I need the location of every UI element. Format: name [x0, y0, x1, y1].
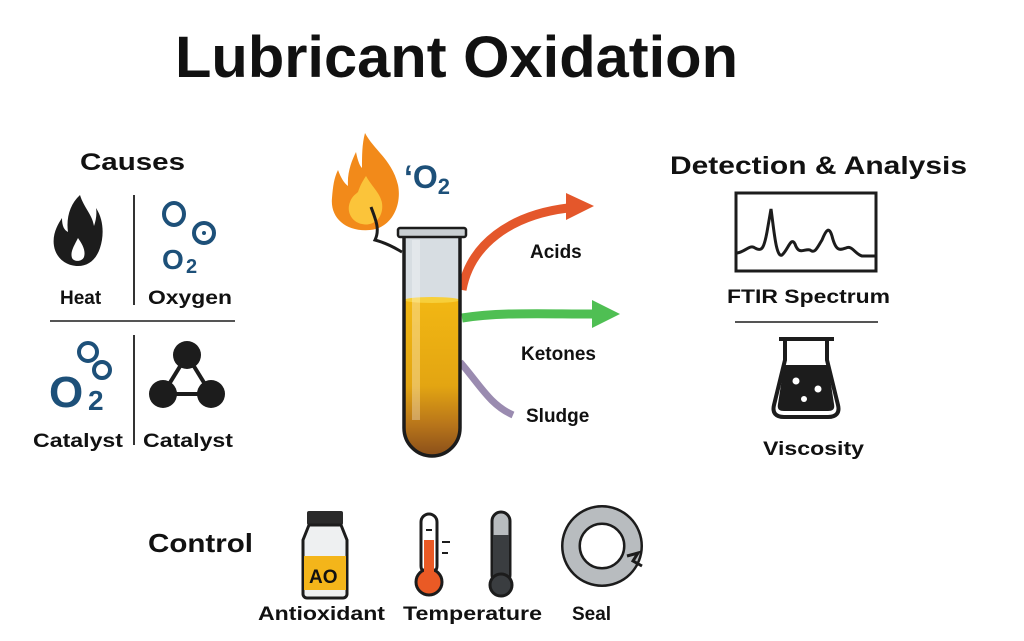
- label: O2: ‘O: [404, 159, 438, 195]
- icon: catalyst O2: 2: [88, 385, 104, 416]
- icon: flask: [773, 339, 839, 417]
- panel: control: [148, 511, 642, 625]
- icon: seal ring: [571, 515, 642, 577]
- label: heat: Heat: [60, 288, 102, 309]
- title: Lubricant Oxidation: [175, 25, 738, 90]
- label: viscosity: Viscosity: [763, 439, 865, 460]
- heading: control: Control: [148, 528, 253, 558]
- panel: detection & analysis: [670, 152, 967, 460]
- panel: reaction: [332, 133, 620, 456]
- panel: causes: [33, 149, 235, 452]
- icon: antioxidant bottle: [303, 511, 347, 598]
- icon: oxygen molecules: O: [162, 244, 184, 275]
- arrow: ketones: [462, 300, 620, 328]
- icon: catalyst O2: O: [49, 368, 83, 417]
- icon: heat flame: [54, 195, 103, 266]
- label: oxygen: Oxygen: [148, 288, 232, 309]
- arrow: acids: [462, 193, 594, 290]
- label: acids: Acids: [530, 242, 582, 263]
- icon: antioxidant bottle: AO: [309, 567, 338, 588]
- label: sludge: Sludge: [526, 406, 589, 427]
- label: catalyst: Catalyst: [33, 431, 124, 452]
- label: FTIR: FTIR Spectrum: [727, 287, 890, 308]
- icon: thermometer red: [416, 514, 450, 595]
- chart: FTIR spectrum: [736, 193, 876, 271]
- label: catalyst 2: Catalyst: [143, 431, 234, 452]
- label: ketones: Ketones: [521, 344, 596, 365]
- label: antioxidant: Antioxidant: [258, 604, 386, 625]
- icon: flame: [332, 133, 402, 252]
- label: temperature: Temperature: [403, 604, 542, 625]
- icon: oxygen molecules: [162, 203, 214, 278]
- icon: catalyst O2: [49, 343, 110, 417]
- label: seal: Seal: [572, 604, 611, 625]
- icon: oxygen molecules: 2: [186, 256, 197, 278]
- icon: thermometer dark: [490, 512, 512, 596]
- heading: causes: Causes: [80, 149, 185, 176]
- label: O2: 2: [438, 174, 450, 199]
- heading: detection: Detection & Analysis: [670, 152, 967, 180]
- arrow: sludge: [460, 362, 513, 415]
- icon: test tube: [398, 228, 466, 456]
- icon: molecule: [149, 341, 225, 408]
